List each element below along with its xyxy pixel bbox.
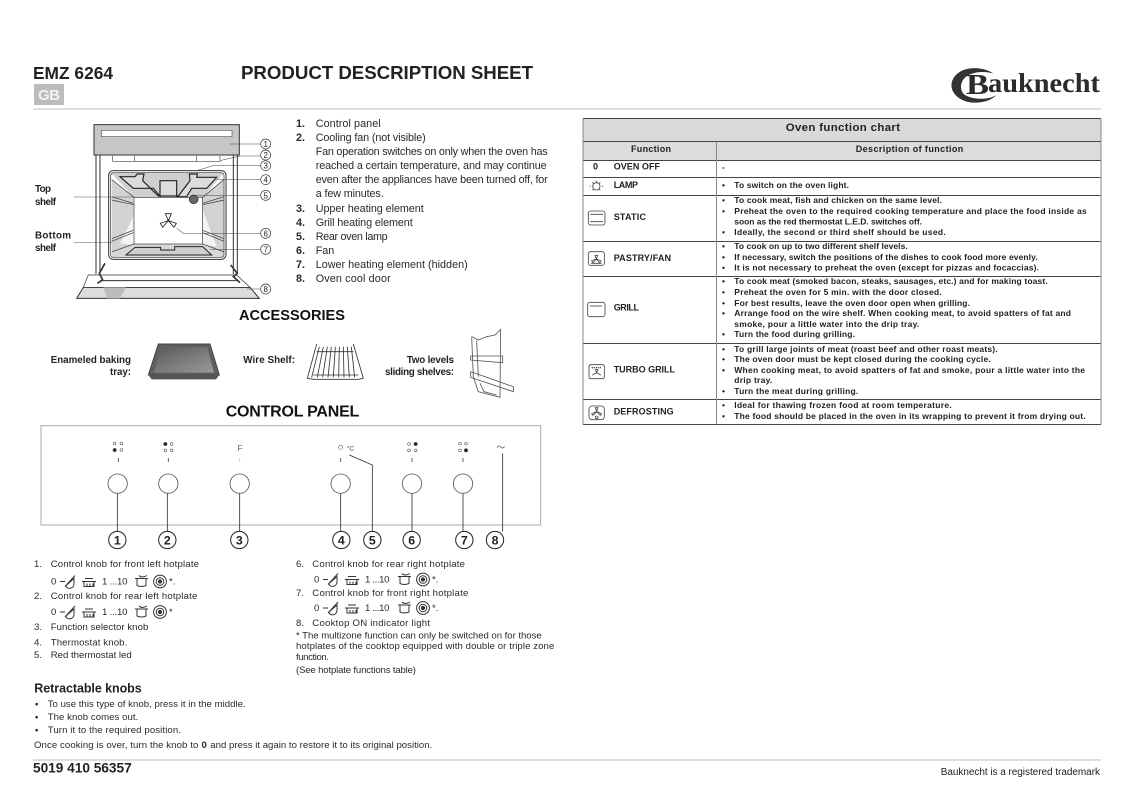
control panel drawing: 5 — [369, 533, 376, 547]
control panel drawing: 4 — [338, 533, 345, 547]
logo: Bauknecht: auknecht — [988, 68, 1100, 98]
row: grill: Arrange food on the wire shelf. When cooking meat, to avoid spatters of fat and — [734, 308, 1071, 318]
row: turbo grill: • — [722, 354, 725, 364]
knob list: left column: *. — [169, 576, 175, 588]
knob list: right column: 7. — [296, 588, 304, 599]
shelf labels: shelf — [35, 243, 57, 254]
retractable knobs text: and press it again to restore it to its original position. — [210, 740, 432, 751]
parts list: Fan — [316, 245, 334, 257]
row: turbo grill: • — [722, 365, 725, 375]
row: lamp: • — [722, 180, 725, 190]
shelf leaders — [74, 197, 133, 242]
row: turbo grill: Turn the meat during grilling. — [734, 386, 858, 396]
retractable knobs text: 0 — [202, 740, 207, 751]
grill heating element — [120, 174, 217, 197]
control panel drawing: 2 — [164, 533, 171, 547]
knob list: right column: 1 ...10 — [365, 603, 390, 614]
knob list: left column — [34, 559, 199, 661]
heading: accessories: ACCESSORIES — [239, 308, 345, 324]
knob list: right column: (See hotplate functions table) — [296, 665, 416, 676]
retractable knobs heading: Retractable knobs — [34, 682, 142, 696]
row: grill: • — [722, 287, 725, 297]
row: oven off: - — [722, 162, 725, 172]
column headers: Function — [631, 144, 671, 154]
leader lines — [117, 453, 503, 532]
row: turbo grill: TURBO GRILL — [614, 364, 676, 374]
accessory labels: Enameled baking — [51, 355, 131, 366]
row: pastry/fan: • — [722, 252, 725, 262]
row: static — [588, 195, 1087, 237]
row: static: soon as the red thermostat L.E.D. switches off. — [734, 216, 922, 226]
parts list: 2. — [296, 132, 305, 144]
control panel fascia — [94, 125, 239, 155]
retractable knobs text: • — [35, 699, 39, 710]
callout numbers 1 to 8 — [261, 139, 271, 294]
row: defrosting: The food should be placed in the oven in its wrapping to prevent it from drying out. — [734, 411, 1086, 421]
logo: Bauknecht — [951, 68, 1100, 103]
oven diagram: 3 — [263, 162, 268, 171]
row: grill: • — [722, 329, 725, 339]
accessory labels: Wire Shelf: — [243, 355, 295, 366]
row: grill: smoke, pour a little water into the drip tray. — [734, 319, 919, 329]
control panel drawing: F — [237, 443, 243, 453]
two level sliding shelves — [471, 329, 513, 397]
knob list: right column: *. — [432, 574, 438, 586]
parts list: Rear oven lamp — [316, 231, 388, 243]
row: defrosting: • — [722, 411, 725, 421]
row: turbo grill: drip tray. — [734, 375, 772, 385]
table grid — [583, 118, 1101, 424]
row: static: Preheat the oven to the required cooking temperature and place the food inside as — [734, 206, 1087, 216]
row: grill: GRILL — [614, 302, 640, 312]
row: turbo grill: • — [722, 344, 725, 354]
knob list: right column: 0 — [314, 574, 319, 586]
control panel drawing: 3 — [236, 533, 243, 547]
retractable knobs text: To use this type of knob, press it in the middle. — [48, 699, 246, 710]
row: turbo grill: The oven door must be kept closed during the cooking cycle. — [734, 354, 991, 364]
oven diagram: 6 — [263, 229, 268, 238]
row: turbo grill: To grill large joints of meat (roast beef and other roast meats). — [734, 344, 998, 354]
retractable knobs text: Turn it to the required position. — [48, 725, 181, 736]
numbered callouts — [109, 531, 504, 549]
control panel drawing: 1 — [114, 533, 121, 547]
parts list: 4. — [296, 217, 305, 229]
row: grill: • — [722, 276, 725, 286]
trademark note: Bauknecht is a registered trademark — [941, 767, 1101, 778]
row: grill: • — [722, 308, 725, 318]
knob list: left column: 5. — [34, 650, 42, 661]
row: grill: • — [722, 298, 725, 308]
column headers: Description of function — [856, 144, 963, 154]
row: grill: Preheat the oven for 5 min. with the door closed. — [734, 287, 942, 297]
knob symbols — [113, 442, 468, 452]
row: lamp — [590, 180, 849, 190]
parts list: Oven cool door — [316, 273, 391, 285]
row: grill: To cook meat (smoked bacon, steaks, sausages, etc.) and for making toast. — [734, 276, 1048, 286]
knob list: right column: Control knob for front right hotplate — [312, 588, 468, 599]
knob list: right column: Cooktop ON indicator light — [312, 618, 430, 629]
retractable knobs text: • — [35, 725, 39, 736]
knob list: left column: Control knob for rear left hotplate — [51, 591, 197, 602]
row: defrosting — [589, 400, 1086, 421]
parts list: 3. — [296, 203, 305, 215]
row: static: • — [722, 195, 725, 205]
control panel drawing — [41, 426, 541, 549]
parts list: reached a certain temperature, and may continue — [316, 160, 547, 172]
knob list: right column: *. — [432, 603, 438, 614]
retractable knobs text — [34, 699, 432, 751]
knob list: left column: 1. — [34, 559, 42, 570]
logo: Bauknecht: B — [966, 69, 989, 101]
row: turbo grill — [589, 344, 1085, 396]
row: turbo grill: When cooking meat, to avoid spatters of fat and smoke, pour a little water into the — [734, 365, 1085, 375]
knob list: left column: Thermostat knob. — [51, 638, 127, 648]
row: pastry/fan — [588, 241, 1039, 272]
row: defrosting: DEFROSTING — [614, 406, 674, 416]
knob list: right column: 1 ...10 — [365, 574, 390, 586]
row: static: To cook meat, fish and chicken on the same level. — [734, 195, 942, 205]
accessory labels — [51, 355, 455, 378]
oven body sides — [96, 155, 237, 274]
knob list: left column: 0 — [51, 576, 56, 588]
knob list: left column: Function selector knob — [51, 622, 148, 633]
knob list: left column: Red thermostat led — [51, 650, 132, 661]
row: static: Ideally, the second or third shelf should be used. — [734, 227, 946, 237]
knob list: left column: * — [169, 607, 173, 618]
knob list: left column: 1 ...10 — [102, 576, 128, 588]
control panel drawing: 7 — [461, 533, 468, 547]
row: static: • — [722, 227, 725, 237]
parts list: Fan operation switches on only when the oven has — [316, 146, 548, 158]
parts list: 6. — [296, 245, 305, 257]
control panel drawing: °C — [347, 444, 354, 452]
knobs — [108, 474, 473, 493]
shelf labels: Bottom — [35, 230, 71, 242]
row: oven off: OVEN OFF — [614, 162, 660, 172]
parts list: a few minutes. — [316, 188, 384, 200]
knob list: left column: 3. — [34, 622, 42, 633]
oven diagram: 5 — [263, 191, 268, 200]
row: lamp: To switch on the oven light. — [734, 180, 849, 190]
row: turbo grill: • — [722, 386, 725, 396]
knob list: right column: * The multizone function can only be switched on for those — [296, 630, 542, 642]
parts list: Lower heating element (hidden) — [316, 259, 468, 271]
row: lamp: LAMP — [614, 180, 638, 190]
row: defrosting: • — [722, 400, 725, 410]
control panel drawing: 6 — [408, 533, 415, 547]
part number: 5019 410 56357 — [33, 760, 132, 776]
accessory labels: Two levels — [407, 355, 455, 366]
shelf labels: Top — [35, 184, 51, 195]
control panel drawing: 8 — [492, 533, 499, 547]
knob list: right column: 6. — [296, 559, 304, 570]
accessory labels: tray: — [110, 367, 131, 378]
retractable knobs text: The knob comes out. — [48, 712, 138, 723]
knob list: right column: hotplates of the cooktop equipped with double or triple zone — [296, 641, 554, 652]
knob ticks — [118, 458, 463, 462]
oven diagram: 8 — [263, 285, 268, 294]
row: pastry/fan: To cook on up to two different shelf levels. — [734, 241, 908, 251]
parts list: Control panel — [316, 118, 381, 130]
rear oven lamp — [189, 195, 198, 204]
parts list: 5. — [296, 231, 305, 243]
knob list: right column: Control knob for rear right hotplate — [312, 559, 465, 570]
shelf labels: shelf — [35, 197, 57, 208]
row: pastry/fan: • — [722, 262, 725, 272]
knob list: right column: 0 — [314, 603, 319, 614]
shelf labels — [35, 184, 71, 254]
title: product description sheet: PRODUCT DESCRIPTION SHEET — [241, 62, 534, 83]
row: static: • — [722, 206, 725, 216]
heading: control panel: CONTROL PANEL — [226, 404, 360, 421]
knob list: left column: 1 ...10 — [102, 607, 128, 618]
row: oven off — [593, 162, 725, 172]
parts list: Cooling fan (not visible) — [316, 132, 426, 144]
fan — [160, 214, 176, 227]
row: oven off: 0 — [593, 162, 598, 172]
enameled baking tray — [148, 344, 219, 379]
retractable knobs text: • — [35, 712, 39, 723]
retractable knobs text: Once cooking is over, turn the knob to — [34, 740, 198, 751]
knob list: right column — [296, 559, 554, 676]
parts list: 8. — [296, 273, 305, 285]
badge: GB language code — [34, 84, 64, 105]
wire shelf — [307, 344, 363, 379]
column headers — [583, 142, 1101, 160]
badge: GB language code: GB — [38, 87, 60, 104]
parts list: 7. — [296, 259, 305, 271]
parts list: Upper heating element — [316, 203, 424, 215]
knob list: left column: 0 — [51, 607, 56, 618]
oven function chart — [583, 118, 1101, 424]
chart title bar — [583, 118, 1101, 142]
knob list: right column: 8. — [296, 618, 304, 629]
knob list: left column: 4. — [34, 638, 42, 648]
row: pastry/fan: • — [722, 241, 725, 251]
row: grill: For best results, leave the oven door open when grilling. — [734, 298, 970, 308]
parts list — [296, 118, 548, 285]
knob list: right column: function. — [296, 652, 329, 663]
title: model number: EMZ 6264 — [33, 63, 113, 83]
row: defrosting: Ideal for thawing frozen food at room temperature. — [734, 400, 952, 410]
parts list: 1. — [296, 118, 305, 130]
row: grill — [588, 276, 1071, 339]
knob list: left column: Control knob for front left hotplate — [51, 559, 199, 570]
lower heating element — [126, 247, 212, 255]
oven diagram: 4 — [263, 176, 268, 185]
oven cavity — [109, 171, 226, 259]
accessories row — [148, 329, 513, 397]
row: pastry/fan: PASTRY/FAN — [614, 253, 671, 263]
oven diagram: 2 — [263, 151, 268, 160]
oven diagram — [74, 125, 271, 298]
callout leaders — [177, 144, 260, 289]
oven diagram: 1 — [263, 140, 268, 149]
accessory labels: sliding shelves: — [385, 367, 454, 378]
row: pastry/fan: It is not necessary to preheat the oven (except for pizzas and focaccias). — [734, 262, 1039, 272]
chart title bar: Oven function chart — [786, 122, 900, 134]
oven diagram: 7 — [263, 245, 268, 254]
row: pastry/fan: If necessary, switch the positions of the dishes to cook food more evenly. — [734, 252, 1038, 262]
cooling fan vent — [113, 156, 220, 161]
parts list: even after the appliances have been turned off, for — [316, 174, 548, 186]
knob list: left column: 2. — [34, 591, 42, 602]
row: static: STATIC — [614, 212, 646, 222]
door and hinges — [77, 263, 259, 298]
row: grill: Turn the food during grilling. — [734, 329, 855, 339]
panel frame — [41, 426, 541, 525]
parts list: Grill heating element — [316, 217, 413, 229]
